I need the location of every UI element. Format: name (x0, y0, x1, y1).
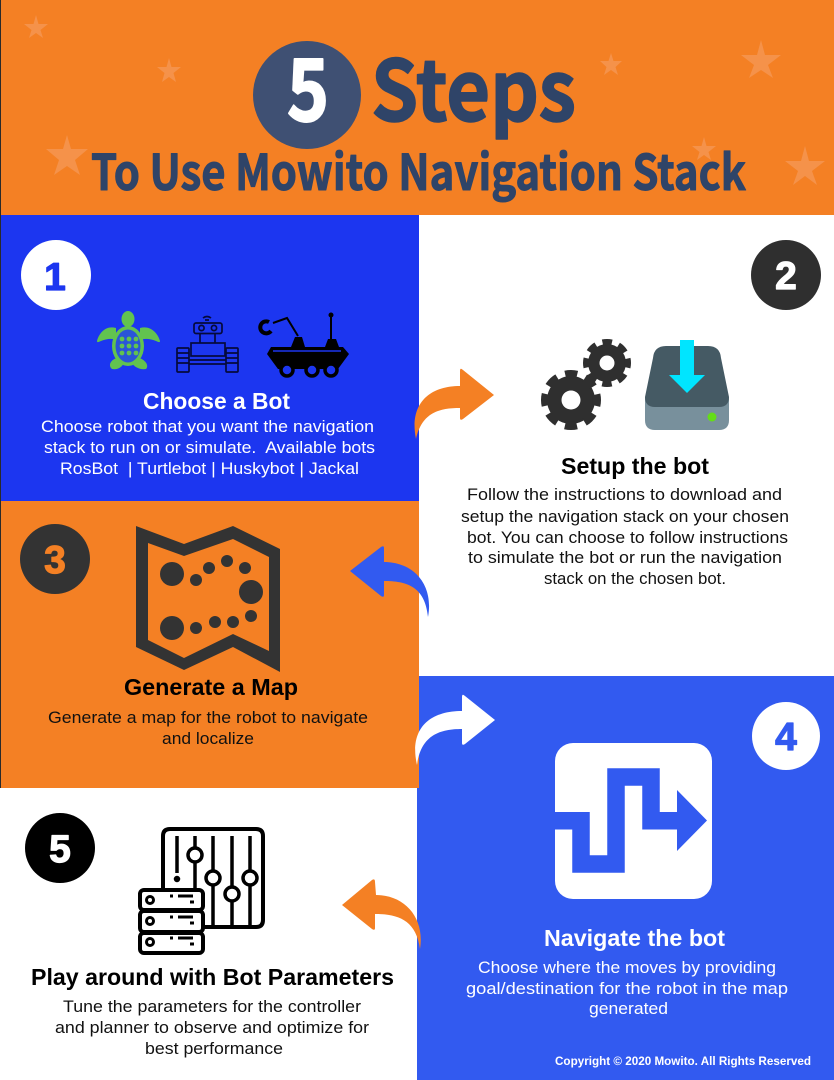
description (48, 708, 368, 748)
panel 4: navigate the bot (417, 676, 834, 1080)
heading: Setup the bot (561, 453, 709, 479)
description: RosBot | Turtlebot | Huskybot | Jackal (60, 459, 359, 478)
description: setup the navigation stack on your chosen (461, 507, 789, 526)
description (41, 417, 375, 478)
panel 3: generate a map (1, 501, 419, 788)
panel 5: play with parameters (25, 813, 394, 1058)
panel 2: setup the bot (461, 240, 821, 588)
icon: map (136, 526, 280, 672)
icon: sliders and servers (140, 829, 263, 953)
step number 1 (21, 240, 91, 310)
icon: tracked robot (177, 316, 238, 372)
description: Choose where the moves by providing (478, 958, 776, 977)
step number 4: 4 (775, 716, 797, 759)
description: and planner to observe and optimize for (55, 1018, 369, 1037)
step number 3: 3 (44, 539, 66, 582)
step number 5 (25, 813, 95, 883)
description (461, 485, 789, 588)
subtitle: To Use Mowito Navigation Stack (91, 134, 746, 205)
description: to simulate the bot or run the navigation (468, 548, 782, 567)
description: Choose robot that you want the navigation (41, 417, 374, 436)
icon: gears (545, 342, 628, 426)
description (466, 958, 788, 1018)
description: Generate a map for the robot to navigate (48, 708, 368, 727)
heading: Navigate the bot (544, 925, 725, 951)
step number 2: 2 (775, 255, 797, 298)
arrow: step 2 to 3 (350, 546, 429, 617)
copyright: Copyright © 2020 Mowito. All Rights Reserved (555, 1054, 811, 1068)
step number 2 (751, 240, 821, 310)
description (55, 997, 369, 1058)
step number 1: 1 (44, 256, 66, 299)
step number 3 (20, 524, 90, 594)
heading: Generate a Map (124, 674, 298, 700)
title: Steps: Steps (371, 25, 576, 146)
heading: Choose a Bot (143, 388, 290, 414)
icon: turtle (97, 311, 160, 369)
arrow: step 3 to 4 (415, 695, 495, 765)
icon: download drive (645, 340, 729, 430)
panel 1: choose a bot (1, 215, 419, 501)
step number 5: 5 (49, 828, 71, 871)
arrow: step 1 to 2 (415, 369, 494, 439)
heading: Play around with Bot Parameters (31, 964, 394, 990)
description: generated (589, 999, 668, 1018)
description: stack to run on or simulate. Available bots (44, 438, 375, 457)
title badge: 5 (253, 21, 361, 149)
title badge: 5: 5 (287, 21, 329, 146)
background stars (24, 15, 825, 185)
header banner (1, 0, 834, 215)
description: and localize (162, 729, 254, 748)
description: Follow the instructions to download and (467, 485, 782, 504)
description: bot. You can choose to follow instructions (467, 528, 788, 547)
description: best performance (145, 1039, 283, 1058)
description: Tune the parameters for the controller (63, 997, 361, 1016)
description: stack on the chosen bot. (544, 569, 726, 588)
arrow: step 4 to 5 (342, 879, 421, 949)
icon: rover (260, 312, 349, 376)
step number 4 (752, 702, 820, 770)
icon: route arrow (555, 743, 712, 899)
description: goal/destination for the robot in the map (466, 979, 788, 998)
